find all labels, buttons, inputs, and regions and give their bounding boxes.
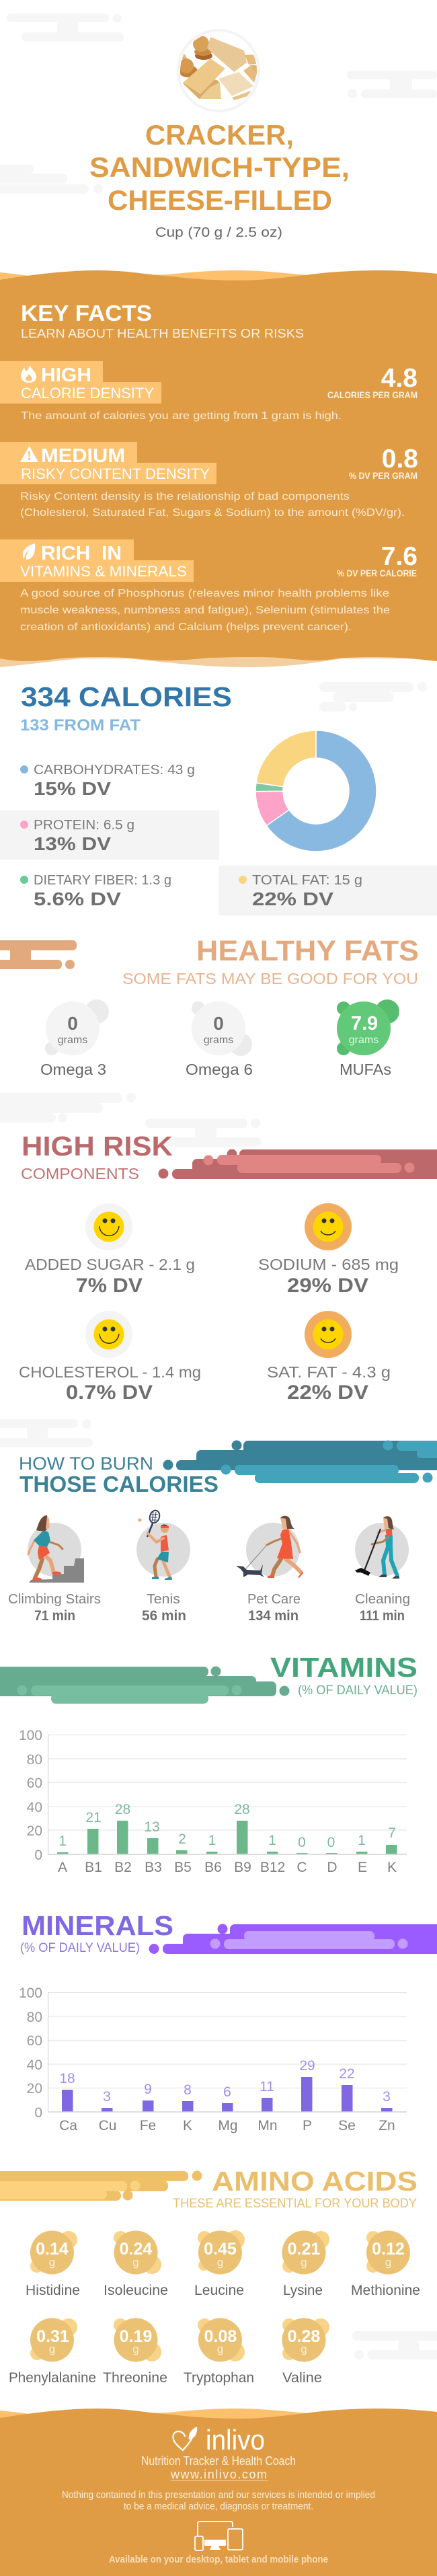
header bars (0, 2171, 202, 2201)
badge: omega 6 (186, 1001, 253, 1078)
bar chart: vitamins: 20 (27, 1823, 42, 1839)
amino: tryptophan: Tryptophan (184, 2370, 254, 2386)
risk: added sugar: 7% DV (76, 1275, 143, 1297)
activity: tennis (136, 1509, 190, 1624)
fact: rich in vitamins and minerals: 7.6 (381, 542, 418, 571)
activity: climbing stairs (8, 1515, 101, 1624)
panel: minerals (19, 1910, 437, 2133)
amino: histidine: 0.14 (36, 2240, 69, 2259)
legend: total fat: 22% DV (252, 888, 333, 909)
activity: cleaning (355, 1516, 410, 1624)
badge: mufas: grams (349, 1034, 379, 1046)
bar chart: vitamins: 1 (58, 1833, 67, 1849)
panel: high risk (19, 1131, 437, 1404)
bar chart: minerals: 6 (223, 2084, 231, 2100)
bar chart: minerals: 100 (19, 1985, 42, 2001)
header bars (149, 1924, 437, 1954)
subheading: (% OF DAILY VALUE) (298, 1683, 418, 1698)
bar chart: vitamins: 80 (27, 1752, 42, 1768)
bar chart: minerals: 22 (339, 2066, 355, 2082)
bar chart: vitamins: B2 (114, 1860, 132, 1875)
amino: histidine (26, 2230, 80, 2298)
risk: saturated fat (267, 1311, 391, 1404)
activity: tennis: Tenis (147, 1592, 180, 1607)
bar chart: vitamins: B12 (260, 1860, 285, 1875)
amino: leucine: 0.45 (204, 2240, 237, 2259)
legend: dietary fiber: 5.6% DV (34, 888, 121, 909)
risk: saturated fat: SAT. FAT - 4.3 g (267, 1363, 391, 1381)
fact: calorie density: 4.8 (381, 364, 418, 393)
icon: devices (195, 2522, 243, 2550)
food photo: crackers (177, 29, 260, 112)
panel: how to burn: THOSE CALORIES (19, 1472, 218, 1497)
serving size: Cup (70 g / 2.5 oz) (155, 225, 282, 240)
bar chart: vitamins: 28 (115, 1802, 130, 1817)
legend: dietary fiber: DIETARY FIBER: 1.3 g (34, 873, 171, 888)
amino: methionine (351, 2230, 420, 2298)
legend: carbohydrates (20, 763, 195, 799)
bar chart: vitamins: 28 (234, 1802, 250, 1817)
panel: key facts (0, 270, 437, 667)
title: SANDWICH-TYPE, (89, 151, 350, 183)
panel: calories (0, 681, 437, 915)
amino: threonine: 0.19 (120, 2327, 152, 2346)
activity: cleaning: Cleaning (355, 1592, 410, 1607)
amino: isoleucine: 0.24 (120, 2240, 152, 2259)
subheading: LEARN ABOUT HEALTH BENEFITS OR RISKS (21, 327, 304, 340)
activity: cleaning: 111 min (360, 1608, 405, 1624)
fact: calorie density: HIGH (41, 365, 91, 386)
badge: omega 6: 0 (213, 1013, 224, 1034)
heading: VITAMINS (270, 1652, 418, 1683)
activity: pet care: Pet Care (247, 1592, 301, 1607)
amino: tryptophan (184, 2318, 254, 2386)
logo: inlivo: inlivo (206, 2424, 265, 2456)
bar chart: vitamins: 13 (144, 1819, 160, 1835)
availability note: Available on your desktop, tablet and mobile phone (109, 2554, 328, 2565)
badge: omega 6: grams (204, 1034, 233, 1046)
icon: warning triangle (20, 446, 38, 462)
icon: flame (21, 365, 36, 383)
badge: omega 6: Omega 6 (186, 1061, 253, 1078)
risk: cholesterol (19, 1311, 201, 1404)
bar chart: minerals: Ca (59, 2118, 77, 2133)
amino: isoleucine: Isoleucine (104, 2283, 168, 2298)
heading: HOW TO BURN (19, 1453, 153, 1474)
amino: valine: g (301, 2343, 307, 2355)
heading: key facts: KEY FACTS (21, 301, 152, 326)
bar chart: minerals: 11 (260, 2079, 274, 2094)
bar chart: vitamins: B1 (85, 1860, 102, 1875)
bar chart: vitamins: C (296, 1860, 307, 1875)
bar chart: vitamins: 21 (85, 1810, 102, 1825)
fact: risky content density: RISKY CONTENT DENSITY (21, 465, 210, 482)
bar chart: vitamins: 2 (178, 1831, 186, 1847)
tagline: Nutrition Tracker & Health Coach (141, 2454, 296, 2468)
bar chart: minerals: 80 (27, 2010, 42, 2025)
amino: methionine: Methionine (351, 2283, 420, 2298)
badge: omega 3: 0 (67, 1013, 78, 1034)
fact: risky content density: MEDIUM (41, 445, 125, 467)
fact: rich in vitamins and minerals: VITAMINS & MINERALS (20, 563, 187, 580)
fact: calorie density (0, 361, 418, 422)
risk: saturated fat: 22% DV (287, 1381, 368, 1404)
bar chart: minerals: K (183, 2118, 192, 2133)
amino: lysine (282, 2230, 329, 2298)
amino: phenylalanine: g (49, 2343, 55, 2355)
legend: dietary fiber (20, 873, 171, 909)
amino: histidine: Histidine (26, 2283, 80, 2298)
bar chart: vitamins: A (58, 1860, 67, 1875)
bar chart: vitamins: B5 (174, 1860, 192, 1875)
amino: leucine (194, 2230, 245, 2298)
risk: cholesterol: 0.7% DV (66, 1381, 153, 1404)
website: www.inlivo.com (170, 2468, 267, 2481)
bar chart: vitamins: K (387, 1860, 397, 1875)
heading: calories: 334 CALORIES (21, 681, 232, 712)
legend: total fat: TOTAL FAT: 15 g (252, 873, 362, 888)
disclaimer: to be a medical advice, diagnosis or treatment. (124, 2501, 313, 2512)
header bars (0, 1667, 289, 1704)
bar chart: minerals: Mn (257, 2118, 278, 2133)
amino: lysine: g (301, 2256, 307, 2269)
badge: mufas: 7.9 (351, 1013, 378, 1034)
badge: mufas (337, 999, 399, 1078)
fact: calorie density: The amount of calories you are getting from 1 gram is high. (21, 410, 342, 422)
amino: valine: Valine (282, 2370, 322, 2386)
fact: risky content density: 0.8 (382, 445, 418, 473)
badge: omega 3 (40, 999, 109, 1078)
amino: threonine: g (132, 2343, 139, 2355)
risk: sodium (258, 1203, 399, 1297)
legend: carbohydrates: CARBOHYDRATES: 43 g (34, 763, 195, 778)
amino: leucine: Leucine (194, 2283, 244, 2298)
bar chart: minerals: 18 (59, 2071, 75, 2086)
title (89, 119, 350, 216)
amino: valine: 0.28 (288, 2327, 320, 2346)
header bars (0, 940, 77, 969)
fact: risky content density: (Cholesterol, Saturated Fat, Sugars & Sodium) to the amount (%DV/gr). (20, 507, 405, 519)
panel: footer (0, 2409, 437, 2576)
bar chart: minerals: Fe (140, 2118, 156, 2133)
subheading: (% OF DAILY VALUE) (20, 1941, 140, 1955)
risk: added sugar (25, 1203, 195, 1297)
bar chart: minerals: 40 (27, 2057, 42, 2073)
activity: climbing stairs: Climbing Stairs (8, 1592, 101, 1607)
amino: methionine: 0.12 (372, 2240, 405, 2259)
bar chart: minerals: 3 (103, 2089, 111, 2105)
amino: phenylalanine: Phenylalanine (9, 2370, 96, 2386)
legend: protein: PROTEIN: 6.5 g (34, 818, 134, 833)
activity: pet care (236, 1516, 303, 1624)
amino: isoleucine: g (132, 2256, 139, 2269)
title: CRACKER, (145, 119, 294, 151)
fact: risky content density: % DV PER GRAM (349, 471, 418, 481)
bar chart: minerals: 29 (299, 2058, 315, 2074)
bar chart: vitamins: 1 (358, 1833, 366, 1848)
amino: lysine: 0.21 (288, 2240, 320, 2259)
bar chart: minerals: 20 (27, 2081, 42, 2096)
bar chart: minerals: Cu (99, 2118, 116, 2133)
amino: tryptophan: 0.08 (204, 2327, 237, 2346)
logo: inlivo (173, 2424, 265, 2456)
bar chart: vitamins: 7 (388, 1825, 396, 1841)
bar chart: minerals (19, 1985, 407, 2133)
fact: rich in vitamins and minerals: muscle weakness, numbness and fatigue), Selenium (stimulates the (20, 605, 390, 616)
bar chart: vitamins: 1 (268, 1833, 276, 1848)
icon: leaf (23, 543, 35, 560)
bar chart: vitamins: 0 (34, 1848, 42, 1863)
panel: vitamins (0, 1652, 418, 1875)
fact: rich in vitamins and minerals: creation of antioxidants) and Calcium (helps prevent cancer). (20, 621, 352, 633)
heading: MINERALS (22, 1910, 173, 1941)
amino: methionine: g (385, 2256, 391, 2269)
bar chart: minerals: 60 (27, 2033, 42, 2049)
activity: tennis: 56 min (142, 1608, 186, 1624)
amino: lysine: Lysine (283, 2283, 323, 2298)
heading: HIGH RISK (22, 1131, 173, 1162)
fact: risky content density (0, 442, 418, 519)
panel: healthy fats (0, 935, 419, 1078)
bar chart: vitamins: 1 (208, 1833, 216, 1848)
heading: HEALTHY FATS (196, 935, 419, 967)
bar chart: vitamins: 40 (27, 1800, 42, 1815)
bar chart: minerals: 0 (34, 2105, 42, 2121)
bar chart: minerals: Zn (379, 2118, 395, 2133)
donut chart (255, 730, 376, 851)
badge: omega 3: grams (58, 1034, 87, 1046)
legend: protein: 13% DV (34, 833, 111, 854)
header bars (159, 1149, 437, 1179)
bar chart: minerals: 3 (383, 2089, 391, 2105)
bar chart: vitamins: D (327, 1860, 337, 1875)
amino: valine (282, 2318, 329, 2386)
fact: rich in vitamins and minerals: % DV PER CALORIE (337, 568, 417, 578)
bar chart: vitamins: 0 (298, 1835, 306, 1850)
bar chart: minerals: 9 (144, 2082, 152, 2097)
bar chart: minerals: P (303, 2118, 312, 2133)
fact: risky content density: Risky Content density is the relationship of bad components (20, 491, 350, 502)
bar chart: vitamins (19, 1728, 407, 1875)
amino: leucine: g (217, 2256, 223, 2269)
panel: amino acids (0, 2166, 420, 2386)
bar chart: vitamins: 60 (27, 1776, 42, 1791)
risk: cholesterol: CHOLESTEROL - 1.4 mg (19, 1363, 201, 1381)
disclaimer: Nothing contained in this presentation and our services is intended or implied (62, 2490, 375, 2501)
risk: sodium: SODIUM - 685 mg (258, 1256, 399, 1273)
subheading: SOME FATS MAY BE GOOD FOR YOU (122, 970, 418, 987)
legend: carbohydrates: 15% DV (34, 778, 111, 799)
risk: added sugar: ADDED SUGAR - 2.1 g (25, 1256, 195, 1273)
heading: AMINO ACIDS (212, 2166, 418, 2197)
fact: rich in vitamins and minerals: RICH IN (41, 543, 122, 564)
legend: protein (20, 818, 134, 854)
legend: total fat (239, 873, 362, 909)
fact: calorie density: CALORIES PER GRAM (327, 390, 418, 400)
bar chart: vitamins: E (358, 1860, 367, 1875)
subheading: from fat: 133 FROM FAT (20, 716, 141, 734)
title: CHEESE-FILLED (108, 184, 332, 216)
bar chart: minerals: Se (338, 2118, 356, 2133)
bar chart: minerals: Mg (218, 2118, 238, 2133)
bar chart: vitamins: B9 (234, 1860, 251, 1875)
amino: threonine (103, 2318, 167, 2386)
amino: isoleucine (104, 2230, 168, 2298)
fact: rich in vitamins and minerals: A good source of Phosphorus (releaves minor health problems like (20, 588, 389, 599)
subheading: THESE ARE ESSENTIAL FOR YOUR BODY (173, 2197, 417, 2211)
bar chart: vitamins: 100 (19, 1728, 42, 1743)
amino: phenylalanine (9, 2318, 96, 2386)
badge: mufas: MUFAs (340, 1061, 391, 1078)
header bars (163, 1441, 437, 1483)
amino: threonine: Threonine (103, 2370, 167, 2386)
activity: pet care: 134 min (248, 1608, 299, 1624)
bar chart: vitamins: B3 (145, 1860, 162, 1875)
fact: calorie density: CALORIE DENSITY (21, 385, 154, 402)
amino: histidine: g (49, 2256, 55, 2269)
subheading: COMPONENTS (21, 1165, 139, 1182)
disclaimer (62, 2490, 375, 2512)
bar chart: minerals: 8 (184, 2082, 192, 2098)
risk: sodium: 29% DV (287, 1275, 368, 1297)
fact: rich in vitamins and minerals (0, 539, 418, 633)
panel: how to burn (8, 1441, 437, 1624)
bar chart: vitamins: B6 (204, 1860, 222, 1875)
amino: tryptophan: g (217, 2343, 223, 2355)
activity: climbing stairs: 71 min (34, 1608, 75, 1624)
badge: omega 3: Omega 3 (40, 1061, 106, 1078)
bar chart: vitamins: 0 (327, 1835, 335, 1850)
amino: phenylalanine: 0.31 (36, 2327, 69, 2346)
